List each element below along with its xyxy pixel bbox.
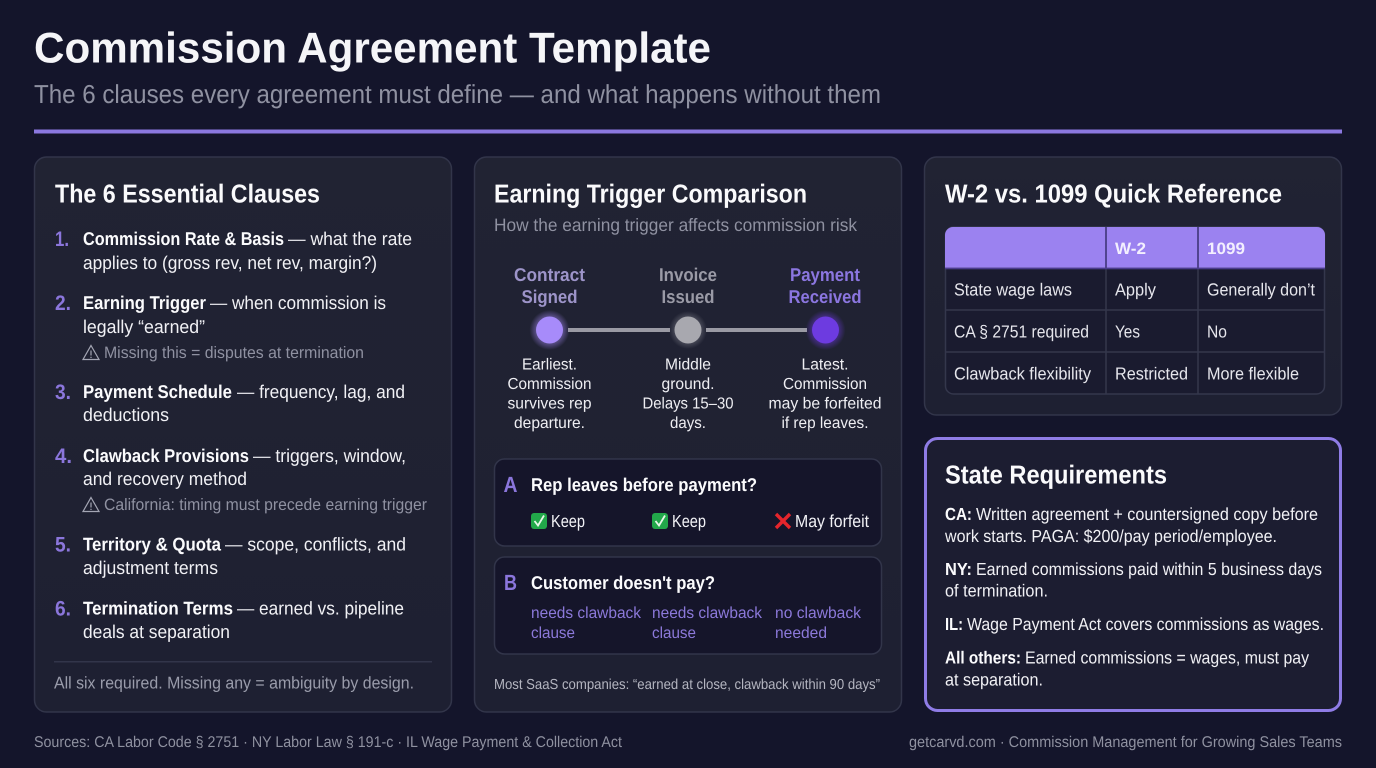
scenario B — [494, 557, 882, 654]
panel: the 6 essential clauses — [34, 157, 452, 712]
clause 5 — [55, 534, 406, 578]
scenario B: needs clawback — [531, 605, 642, 622]
panel subtitle: How the earning trigger affects commission risk — [494, 215, 858, 235]
step: invoice issued: days. — [670, 415, 706, 432]
scenario A: A — [504, 472, 518, 497]
comparison table: Restricted — [1115, 364, 1188, 384]
California requirement: work starts. PAGA: $200/pay period/employee. — [944, 526, 1277, 546]
New York requirement: Earned commissions paid within 5 business days — [976, 559, 1322, 579]
clause 5: Territory & Quota — [83, 534, 222, 554]
step: payment received: if rep leaves. — [782, 415, 868, 432]
clause 6: 6. — [55, 598, 71, 620]
scenario A: Keep — [551, 511, 585, 531]
clause 2: 2. — [55, 292, 71, 315]
comparison table: No — [1207, 322, 1227, 342]
step: payment received: Payment — [790, 264, 860, 285]
step: invoice issued: ground. — [662, 376, 714, 393]
comparison table: Clawback flexibility — [954, 364, 1091, 384]
other states requirement: Earned commissions = wages, must pay — [1025, 648, 1309, 668]
scenario B: clause — [652, 625, 696, 642]
icon: red cross — [776, 514, 790, 528]
Illinois requirement: Wage Payment Act covers commissions as wages. — [967, 614, 1324, 634]
clause 1: 1. — [55, 228, 69, 251]
panel: W-2 vs 1099 — [924, 157, 1342, 415]
clause 5: 5. — [55, 534, 71, 556]
step: contract signed: Earliest. — [522, 356, 577, 374]
footer: sources: Sources: CA Labor Code § 2751 · NY Labor Law § 191-c · IL Wage Payment & Collection Act — [34, 734, 623, 751]
icon: green check — [652, 513, 668, 529]
heading: earning trigger: Earning Trigger Comparison — [494, 178, 807, 208]
comparison table: More flexible — [1207, 364, 1299, 384]
clause 5: adjustment terms — [83, 557, 218, 578]
clause 4: and recovery method — [83, 468, 247, 489]
scenario B: Customer doesn't pay? — [531, 572, 715, 593]
California requirement: CA: — [945, 504, 972, 524]
scenario A: Keep — [672, 511, 706, 531]
step: contract signed — [508, 264, 592, 432]
comparison table: CA § 2751 required — [954, 322, 1089, 342]
New York requirement: NY: — [945, 559, 972, 579]
Illinois requirement: IL: — [945, 614, 963, 634]
icon: green check — [531, 513, 547, 529]
scenario B: clause — [531, 625, 575, 642]
clause 4 — [55, 445, 427, 514]
panel footnote: All six required. Missing any = ambiguity by design. — [54, 674, 414, 692]
New York requirement: of termination. — [945, 580, 1048, 600]
scenario B: B — [504, 570, 517, 595]
clause 3: deductions — [83, 404, 169, 425]
scenario B: needed — [775, 625, 827, 642]
step: payment received: Commission — [783, 376, 867, 393]
clause 4: Clawback Provisions — [83, 445, 249, 466]
clause 6: — earned vs. pipeline — [237, 598, 404, 618]
comparison table: Apply — [1115, 280, 1156, 300]
clause 3 — [55, 381, 405, 425]
step: contract signed: Signed — [522, 286, 578, 307]
clause 1: Commission Rate & Basis — [83, 228, 284, 249]
step: invoice issued: Invoice — [659, 264, 717, 285]
comparison table — [945, 227, 1325, 394]
clause 4: 4. — [55, 445, 72, 468]
clause 1: applies to (gross rev, net rev, margin?) — [83, 252, 377, 273]
clause 1: — what the rate — [288, 228, 412, 249]
timeline — [508, 264, 882, 432]
clause 6: Termination Terms — [83, 598, 233, 618]
scenario B: needs clawback — [652, 605, 763, 622]
clause 1 — [55, 228, 412, 273]
step: invoice issued: Delays 15–30 — [642, 396, 734, 412]
warning note: missing earning trigger: Missing this = disputes at termination — [104, 344, 364, 362]
California requirement — [944, 504, 1318, 546]
step: invoice issued: Issued — [662, 286, 714, 307]
subtitle: The 6 clauses every agreement must define — and what happens without them — [34, 79, 881, 109]
step: payment received: Latest. — [802, 356, 848, 374]
step: contract signed: Contract — [514, 264, 585, 285]
clause 2 — [55, 292, 386, 362]
scenario A: May forfeit — [795, 511, 869, 531]
clause 3: 3. — [55, 381, 71, 404]
clause 3: — frequency, lag, and — [237, 381, 405, 402]
clause 2: — when commission is — [210, 292, 386, 313]
comparison table: State wage laws — [954, 280, 1072, 300]
heading: state requirements: State Requirements — [945, 460, 1167, 490]
clause 2: Earning Trigger — [83, 292, 206, 313]
step: payment received — [768, 264, 882, 432]
California requirement: Written agreement + countersigned copy before — [976, 504, 1318, 524]
step: contract signed: Commission — [508, 376, 592, 393]
panel footnote: Most SaaS companies: “earned at close, clawback within 90 days” — [494, 677, 880, 693]
step: invoice issued: Middle — [665, 356, 711, 374]
other states requirement — [945, 648, 1309, 690]
step: invoice issued — [642, 264, 734, 432]
other states requirement: All others: — [945, 648, 1021, 668]
scenario A: Rep leaves before payment? — [531, 474, 757, 495]
step: payment received: may be forfeited — [768, 396, 882, 412]
comparison table: 1099 — [1207, 240, 1245, 258]
title: Commission Agreement Template — [34, 24, 711, 72]
step: contract signed: departure. — [514, 415, 585, 432]
scenario A — [494, 459, 882, 546]
step: contract signed: survives rep — [508, 396, 592, 412]
scenario B: no clawback — [775, 605, 862, 622]
comparison table: Generally don’t — [1207, 280, 1315, 300]
clause 3: Payment Schedule — [83, 381, 232, 402]
panel: earning trigger comparison — [474, 157, 902, 712]
other states requirement: at separation. — [945, 670, 1043, 690]
comparison table: Yes — [1115, 322, 1140, 342]
clause 2: legally “earned” — [83, 316, 205, 337]
comparison table: W-2 — [1115, 240, 1146, 258]
footer: brand: getcarvd.com · Commission Management for Growing Sales Teams — [909, 734, 1342, 751]
clause 6: deals at separation — [83, 621, 230, 642]
panel: state requirements — [926, 438, 1340, 710]
warning note: California timing: California: timing must precede earning trigger — [104, 496, 427, 514]
step: payment received: Received — [788, 286, 862, 307]
New York requirement — [945, 559, 1322, 600]
clause 5: — scope, conflicts, and — [225, 534, 406, 554]
clause 6 — [55, 598, 404, 642]
heading: quick reference: W-2 vs. 1099 Quick Reference — [945, 178, 1282, 208]
heading: essential clauses: The 6 Essential Clauses — [55, 178, 320, 208]
clause 4: — triggers, window, — [253, 445, 406, 466]
